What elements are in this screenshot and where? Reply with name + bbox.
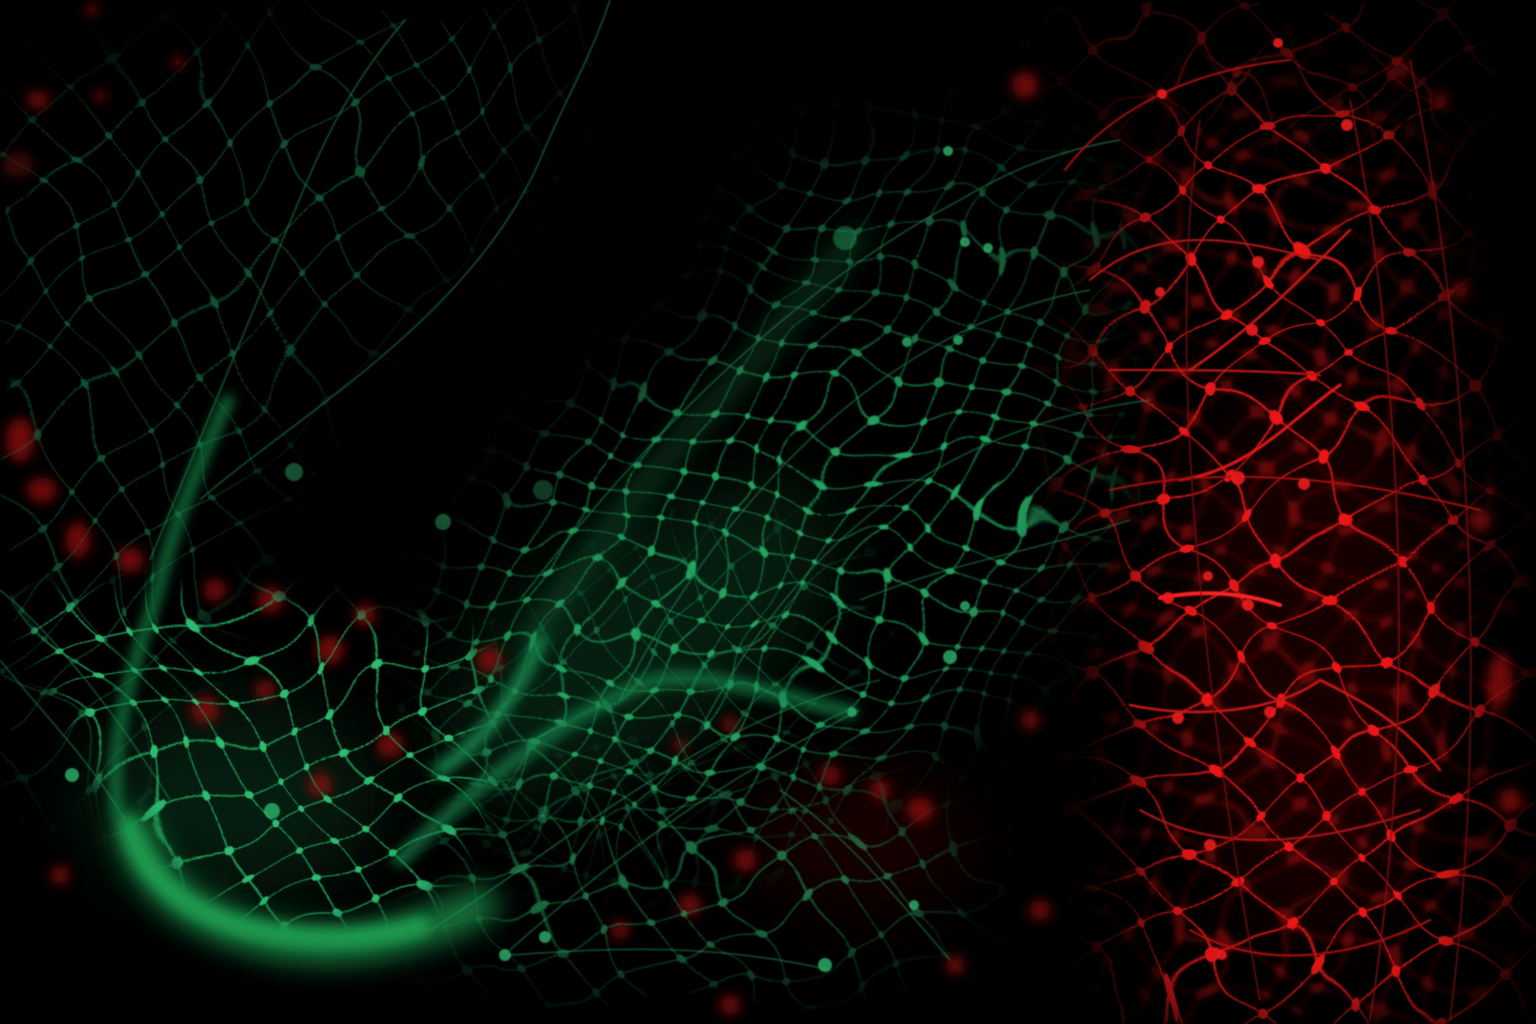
net: lower green lattice: [397, 737, 1002, 1009]
knots: green nodes: [65, 146, 993, 972]
strands: red arcs and bright ridges: [1065, 60, 1480, 1020]
net: red lattice, front layer: [1000, 0, 1536, 1024]
net: red top lattice: [1044, 0, 1494, 167]
glow: soft colour haze: [80, 380, 1440, 940]
net: upper-left green lattice: [0, 0, 592, 810]
net: lower-left bowl lattice: [11, 570, 516, 930]
knots: red nodes: [1155, 38, 1353, 960]
strands: thin green curved lines: [0, 0, 1150, 970]
net: middle green lattice: [388, 105, 1152, 890]
strands: bright green gathered sweep: [115, 235, 860, 945]
net: dense central green lattice: [428, 504, 894, 868]
net: red lattice, back layer: [1044, 44, 1532, 1024]
